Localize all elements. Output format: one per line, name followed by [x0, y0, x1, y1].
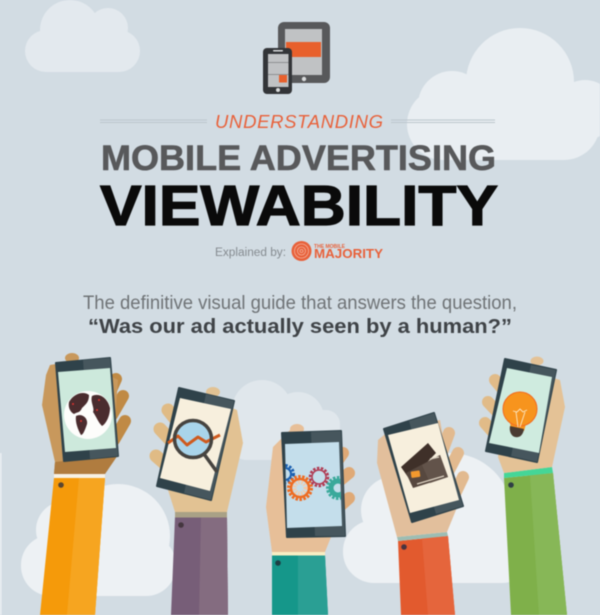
sleeve: orange: [40, 478, 105, 615]
icon: phone: [263, 48, 292, 94]
arm 3: gears phone: [266, 424, 349, 615]
logo: the mobile majority: [292, 241, 383, 261]
arm 2: magnifier phone: [156, 387, 243, 615]
sleeve: teal: [272, 555, 328, 615]
logo: brain mark: [292, 241, 312, 261]
icon: tablet and phone: [263, 22, 330, 94]
heading: mobile advertising: MOBILE ADVERTISING: [101, 139, 496, 178]
cuff: [54, 474, 105, 478]
cloud: top right: [407, 28, 600, 160]
cloud: top left: [25, 0, 140, 72]
phone screen: [58, 368, 116, 452]
left edge sliver: [0, 453, 2, 615]
phone body: [282, 431, 345, 537]
cuff: [504, 467, 553, 478]
arm 5: light bulb phone: [485, 356, 567, 615]
cuff: [272, 552, 325, 556]
logo: wordmark small: THE MOBILE: [314, 244, 346, 250]
credit: explained by: Explained by:: [215, 247, 286, 259]
subtitle line: The definitive visual guide that answers the question,: [83, 292, 517, 314]
phone body: [486, 359, 556, 462]
heading rules: [100, 120, 495, 122]
subtitle question: “Was our ad actually seen by a human?”: [88, 315, 512, 338]
icon: credit cards: [401, 443, 448, 488]
phone screen: [388, 423, 459, 513]
heading: understanding: UNDERSTANDING: [215, 111, 383, 132]
sleeve: purple: [171, 517, 228, 615]
fingers: [442, 433, 463, 498]
logo: wordmark large: MAJORITY: [314, 246, 383, 261]
hand: [498, 356, 565, 473]
phone screen: [489, 368, 552, 453]
icon: magnifier chart: [168, 420, 220, 472]
cloud: bottom left: [21, 484, 176, 596]
sleeve: red-orange: [398, 536, 455, 615]
phone screen: [285, 442, 342, 528]
heading: viewability: VIEWABILITY: [100, 174, 498, 238]
hand: [165, 387, 243, 512]
arm 4: credit card phone: [377, 413, 463, 615]
arm 1: globe phone: [40, 353, 125, 615]
hand: [266, 424, 340, 552]
cloud: centre back: [232, 380, 340, 460]
icon: tablet: [278, 22, 330, 83]
cloud: bottom right: [343, 453, 533, 583]
cuff: [175, 512, 227, 518]
hand: [377, 420, 456, 537]
fingers: [338, 453, 349, 508]
icon: globe: [64, 391, 112, 439]
phone body: [384, 413, 463, 522]
fingers: [156, 410, 180, 470]
hand: [42, 353, 118, 474]
sleeve: green: [504, 473, 567, 615]
fingers: [112, 379, 125, 440]
icon: light bulb: [503, 392, 537, 437]
cuff: [397, 532, 448, 541]
phone body: [157, 388, 234, 500]
phone body: [56, 358, 118, 461]
fingers: [485, 380, 510, 440]
phone screen: [160, 398, 231, 491]
icon: gears: [276, 466, 348, 500]
